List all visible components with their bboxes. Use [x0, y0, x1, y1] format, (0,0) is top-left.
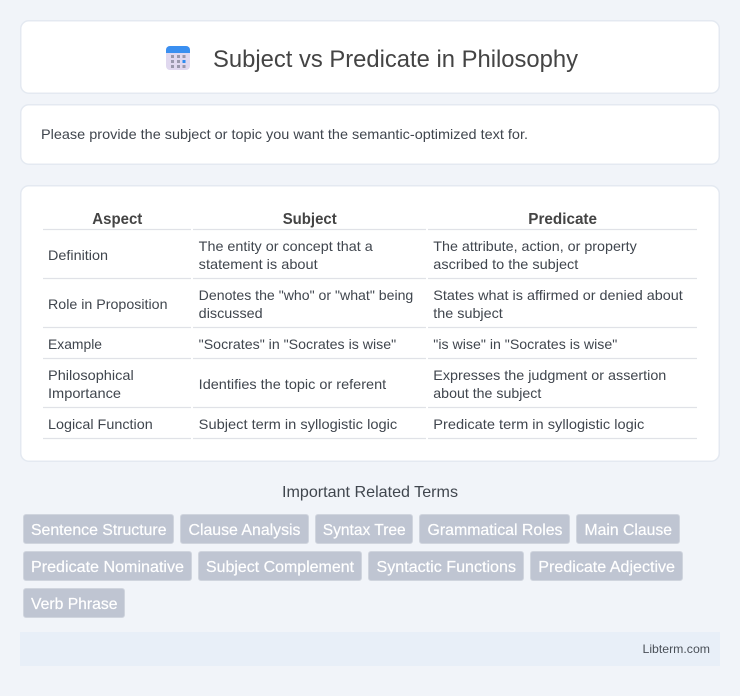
tag: Syntactic Functions: [376, 559, 516, 576]
table header: Predicate: [528, 211, 597, 228]
row: role in proposition: [48, 287, 683, 321]
panel: comparison table: [21, 186, 719, 461]
row: role in proposition: the subject: [433, 305, 503, 321]
row: definition: ascribed to the subject: [433, 256, 578, 272]
panel: intro text: [21, 105, 719, 164]
row: logical function: [48, 416, 644, 432]
row: role in proposition: Denotes the "who" or "what" being: [199, 287, 413, 303]
tag: [368, 552, 524, 580]
tag: [24, 552, 192, 580]
row: logical function: Predicate term in syllogistic logic: [433, 416, 644, 432]
tag: [24, 588, 124, 618]
tag: Sentence Structure: [31, 522, 167, 539]
tag: Predicate Nominative: [31, 559, 184, 576]
tag: [530, 552, 682, 580]
tag: [24, 514, 174, 544]
row: philosophical importance: Identifies the topic or referent: [199, 376, 386, 392]
row: definition: [48, 238, 637, 272]
row: example: Example: [48, 336, 102, 352]
icon: calendar: [166, 46, 190, 70]
heading: related terms: Important Related Terms: [282, 484, 458, 501]
row: definition: The attribute, action, or property: [433, 238, 637, 254]
row: definition: statement is about: [199, 256, 318, 272]
title: Subject vs Predicate in Philosophy: [213, 46, 578, 73]
panel: intro text: Please provide the subject or topic you want the semantic-optimized text for.: [41, 126, 528, 142]
tag: [420, 514, 570, 544]
row: example: "is wise" in "Socrates is wise": [433, 336, 617, 352]
row: philosophical importance: [48, 367, 666, 401]
panel: title header: [21, 21, 719, 93]
row: role in proposition: States what is affirmed or denied about: [433, 287, 683, 303]
row: philosophical importance: Importance: [48, 385, 121, 401]
tag: Grammatical Roles: [428, 522, 562, 539]
row: definition: Definition: [48, 247, 108, 263]
row: role in proposition: Role in Proposition: [48, 296, 168, 312]
footer: [20, 632, 720, 666]
tag: Clause Analysis: [188, 522, 300, 539]
row: definition: The entity or concept that a: [199, 238, 373, 254]
tag: [198, 552, 362, 580]
tag: Syntax Tree: [323, 522, 406, 539]
row: logical function: Subject term in syllogistic logic: [199, 416, 397, 432]
footer: Libterm.com: [642, 642, 710, 656]
tag: Subject Complement: [206, 559, 355, 576]
table header: Subject: [283, 211, 337, 228]
tag: Main Clause: [584, 522, 672, 539]
tag: [180, 514, 308, 544]
tag: Verb Phrase: [31, 596, 118, 613]
row: role in proposition: discussed: [199, 305, 263, 321]
row: example: "Socrates" in "Socrates is wise": [199, 336, 396, 352]
table header: [92, 211, 597, 228]
row: philosophical importance: Expresses the judgment or assertion: [433, 367, 666, 383]
tag: [316, 514, 412, 544]
row: philosophical importance: about the subject: [433, 385, 541, 401]
row: example: [48, 336, 617, 352]
tag: Predicate Adjective: [538, 559, 675, 576]
row: logical function: Logical Function: [48, 416, 153, 432]
table header: Aspect: [92, 211, 143, 228]
row: philosophical importance: Philosophical: [48, 367, 134, 383]
tag: [576, 514, 680, 544]
panel: related term tags: [24, 514, 682, 618]
